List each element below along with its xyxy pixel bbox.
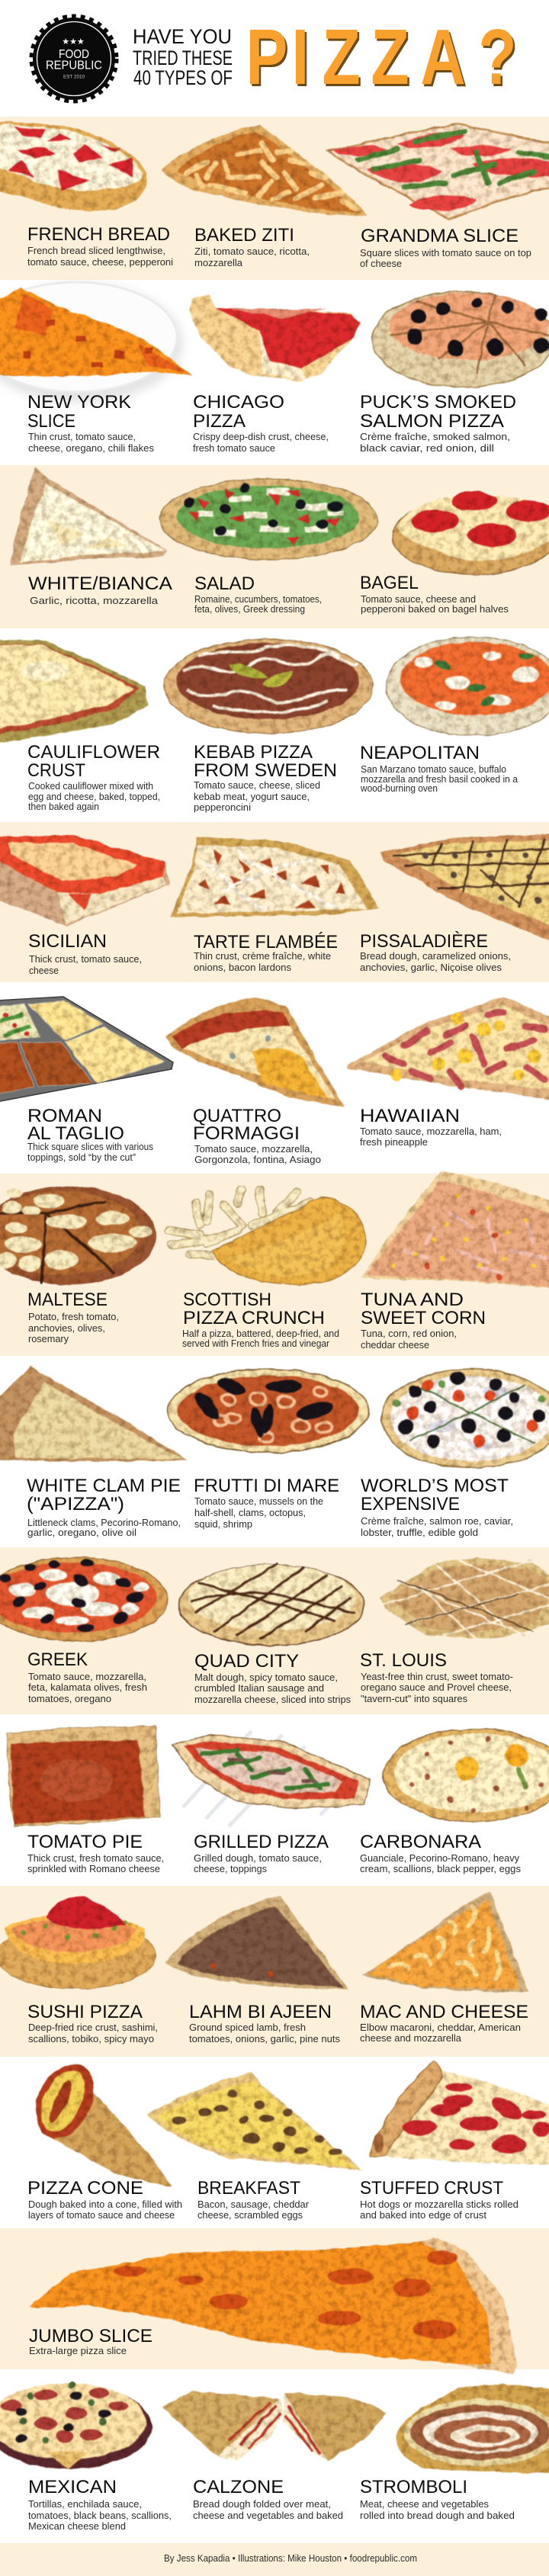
description: Puck's Smoked Salmon Pizza — [360, 431, 510, 454]
heading: Bagel: BAGEL — [360, 573, 419, 593]
description: Hawaiian — [360, 1126, 502, 1148]
pizza: baked ziti — [161, 124, 368, 216]
heading: Chicago Pizza: PIZZA — [193, 411, 246, 432]
description: Maltese: anchovies, olives, — [28, 1322, 105, 1334]
description: Breakfast — [197, 2199, 310, 2221]
pizza: breakfast — [147, 2072, 364, 2171]
logo: Food Republic badge: EST 2010 — [63, 75, 85, 79]
pizza: pizza cone — [24, 2054, 172, 2187]
pizza: salad — [159, 479, 377, 560]
heading: New York Slice — [27, 392, 132, 432]
description: Cauliflower Crust: then baked again — [28, 801, 99, 812]
description: Frutti di Mare: half-shell, clams, octopus, — [194, 1507, 306, 1518]
heading: Grandma Slice: GRANDMA SLICE — [361, 226, 518, 246]
description: Kebab Pizza from Sweden: pepperoncini — [194, 801, 251, 813]
heading: Tomato Pie: TOMATO PIE — [27, 1832, 143, 1852]
description: Hawaiian: Tomato sauce, mozzarella, ham, — [360, 1126, 502, 1137]
left half — [162, 2391, 284, 2460]
description: Cauliflower Crust — [28, 780, 160, 812]
heading: St. Louis: ST. LOUIS — [360, 1650, 447, 1671]
description: Frutti di Mare — [194, 1495, 323, 1530]
description: Calzone: Bread dough folded over meat, — [193, 2498, 331, 2510]
pizza: sicilian — [0, 835, 170, 927]
description: Mexican — [28, 2498, 172, 2532]
description: Cauliflower Crust: Cooked cauliflower mixed with — [28, 780, 153, 792]
heading: Maltese: MALTESE — [27, 1290, 108, 1310]
description: Lahm Bi Ajeen: tomatoes, onions, garlic, pine nuts — [189, 2033, 340, 2044]
heading: Sicilian: SICILIAN — [28, 931, 107, 952]
description: Chicago Pizza: fresh tomato sauce — [193, 442, 275, 454]
description: Quad City: mozzarella cheese, sliced into strips — [194, 1694, 351, 1705]
description: Roman al Taglio: Thick square slices with various — [27, 1141, 153, 1152]
pizza: roman al taglio tray — [0, 997, 173, 1102]
description: Baked Ziti: Ziti, tomato sauce, ricotta, — [194, 246, 310, 257]
pizza: white clam pie — [0, 1365, 188, 1462]
pizza: cauliflower crust — [0, 639, 149, 744]
description: Tuna and Sweet Corn — [361, 1328, 457, 1351]
heading: French Bread: FRENCH BREAD — [27, 224, 170, 245]
description: Bagel: pepperoni baked on bagel halves — [361, 603, 509, 615]
heading: White/Bianca: WHITE/BIANCA — [28, 573, 173, 594]
description: Maltese — [28, 1311, 119, 1344]
heading: Tuna and Sweet Corn: SWEET CORN — [361, 1308, 486, 1328]
pizza: st. louis — [380, 1557, 549, 1640]
description: Greek: tomatoes, oregano — [28, 1693, 111, 1704]
logo: Food Republic badge — [32, 17, 116, 101]
description: Grilled Pizza — [194, 1852, 322, 1874]
description: Breakfast: Bacon, sausage, cheddar — [197, 2199, 310, 2210]
heading: Tuna and Sweet Corn: TUNA AND — [361, 1290, 464, 1310]
pizza: white bianca — [10, 465, 168, 566]
heading: Greek: GREEK — [27, 1649, 88, 1670]
description: Mexican: Mexican cheese blend — [28, 2520, 126, 2532]
description: Hawaiian: fresh pineapple — [360, 1136, 428, 1148]
description: Bagel — [361, 593, 509, 615]
description: Pizza Cone: Dough baked into a cone, filled with — [28, 2199, 182, 2210]
description: World's Most Expensive: lobster, truffle, edible gold — [361, 1527, 478, 1538]
heading: World's Most Expensive: EXPENSIVE — [361, 1494, 460, 1514]
pizza: world's most expensive — [381, 1369, 549, 1468]
heading: Quattro Formaggi: QUATTRO — [193, 1106, 281, 1126]
description: Calzone: cheese and vegetables and baked — [193, 2510, 343, 2521]
description: Neapolitan: San Marzano tomato sauce, buffalo — [361, 763, 506, 775]
description: Stuffed Crust — [360, 2199, 518, 2221]
heading: Kebab Pizza from Sweden: FROM SWEDEN — [194, 760, 337, 781]
description: Tarte Flambée — [194, 950, 331, 973]
pizza: neapolitan — [386, 637, 549, 736]
description: Carbonara — [360, 1852, 521, 1874]
heading: Mac and Cheese: MAC AND CHEESE — [360, 2002, 528, 2022]
description: Kebab Pizza from Sweden: Tomato sauce, cheese, sliced — [194, 779, 320, 791]
description: Pizza Cone — [28, 2199, 182, 2221]
description: Pissaladière: anchovies, garlic, Niçoise olives — [360, 962, 502, 973]
description: French Bread: tomato sauce, cheese, pepperoni — [27, 256, 173, 268]
description: Stromboli: Meat, cheese and vegetables — [360, 2498, 489, 2510]
description: White/Bianca: Garlic, ricotta, mozzarella — [30, 595, 159, 606]
description: Neapolitan — [360, 763, 518, 794]
title: have you tried these 40 types of: HAVE YOU — [133, 25, 232, 48]
heading: White Clam Pie: ("APIZZA") — [27, 1494, 124, 1514]
description: Kebab Pizza from Sweden — [194, 779, 320, 813]
heading: Scottish Pizza Crunch: PIZZA CRUNCH — [183, 1308, 325, 1328]
logo: Food Republic badge: REPUBLIC — [46, 59, 102, 72]
right half — [284, 2392, 387, 2462]
heading: Frutti di Mare: FRUTTI DI MARE — [194, 1476, 339, 1496]
description: Salad: feta, olives, Greek dressing — [194, 603, 305, 615]
pizza: quattro formaggi — [165, 997, 345, 1107]
description: St. Louis — [361, 1671, 513, 1704]
heading: Breakfast: BREAKFAST — [197, 2178, 300, 2199]
fries — [168, 1190, 311, 1256]
pizza: quad city — [178, 1563, 364, 1646]
description: Maltese: rosemary — [28, 1333, 69, 1344]
pizza: french bread — [0, 122, 148, 211]
heading: Hawaiian: HAWAIIAN — [360, 1106, 460, 1126]
description: Roman al Taglio — [27, 1141, 153, 1163]
heading: New York Slice: NEW YORK — [27, 392, 132, 413]
heading: Puck's Smoked Salmon Pizza — [360, 392, 516, 432]
description: Quad City: Malt dough, spicy tomato sauce, — [194, 1672, 338, 1683]
description: Tuna and Sweet Corn: Tuna, corn, red onion, — [361, 1328, 457, 1339]
heading: Chicago Pizza — [193, 392, 284, 432]
heading: Pizza Cone: PIZZA CONE — [27, 2178, 143, 2199]
description: French Bread — [27, 245, 173, 268]
heading: Quad City: QUAD CITY — [194, 1651, 299, 1672]
description: Kebab Pizza from Sweden: kebab meat, yogurt sauce, — [194, 791, 310, 802]
description: Mac and Cheese — [360, 2022, 521, 2044]
description: Grandma Slice — [360, 247, 531, 269]
pizza: pissaladiere — [380, 834, 549, 946]
description: Tomato Pie — [27, 1852, 164, 1874]
description: Quattro Formaggi — [194, 1143, 321, 1165]
description: Chicago Pizza — [193, 431, 329, 454]
description: Carbonara: Guanciale, Pecorino-Romano, heavy — [360, 1852, 519, 1864]
heading: Roman al Taglio — [27, 1106, 124, 1144]
description: Lahm Bi Ajeen — [189, 2022, 340, 2044]
description: New York Slice: Thin crust, tomato sauce, — [28, 431, 136, 442]
pizza: carbonara — [383, 1729, 549, 1822]
description: Lahm Bi Ajeen: Ground spiced lamb, fresh — [189, 2022, 306, 2033]
heading: Scottish Pizza Crunch: SCOTTISH — [183, 1290, 271, 1310]
heading: New York Slice: SLICE — [27, 411, 75, 432]
description: Greek — [28, 1671, 147, 1704]
fried half pizza — [212, 1197, 366, 1284]
description: Baked Ziti — [194, 246, 310, 268]
heading: Carbonara: CARBONARA — [360, 1832, 482, 1852]
heading: Cauliflower Crust: CRUST — [27, 760, 85, 781]
panel: row 5 band — [0, 822, 549, 982]
pizza: tomato pie — [7, 1726, 161, 1826]
title: PIZZA?: PIZZA? — [246, 13, 517, 101]
description: Cauliflower Crust: egg and cheese, baked, topped, — [28, 791, 160, 802]
heading: World's Most Expensive — [361, 1476, 509, 1514]
panel: row 1 band — [0, 117, 549, 280]
description: Carbonara: cream, scallions, black pepper, eggs — [360, 1863, 521, 1874]
description: Quattro Formaggi: Tomato sauce, mozzarella, — [194, 1143, 313, 1155]
pizza: greek — [0, 1557, 168, 1641]
description: Stuffed Crust: Hot dogs or mozzarella sticks rolled — [360, 2199, 518, 2210]
logo: Food Republic badge: FOOD — [59, 48, 89, 61]
description: Mac and Cheese: Elbow macaroni, cheddar, American — [360, 2022, 521, 2033]
description: New York Slice — [28, 431, 154, 454]
description: Tuna and Sweet Corn: cheddar cheese — [361, 1339, 429, 1351]
description: Tarte Flambée: onions, bacon lardons — [194, 962, 292, 973]
pizza: mac and cheese — [361, 1891, 530, 1993]
heading: White Clam Pie: WHITE CLAM PIE — [27, 1476, 181, 1496]
pizza: lahm bi ajeen — [165, 1895, 348, 1990]
pizza: tarte flambee — [170, 837, 380, 917]
heading: Tuna and Sweet Corn — [361, 1290, 486, 1328]
description: Tomato Pie: Thick crust, fresh tomato sauce, — [27, 1852, 164, 1864]
description: Baked Ziti: mozzarella — [194, 257, 243, 268]
description: Chicago Pizza: Crispy deep-dish crust, cheese, — [193, 431, 329, 442]
pizza: bagel — [392, 491, 549, 575]
description: Scottish Pizza Crunch — [182, 1328, 339, 1349]
description: World's Most Expensive — [361, 1515, 513, 1538]
description: Mexican: Tortillas, enchilada sauce, — [28, 2498, 142, 2510]
heading: Puck's Smoked Salmon Pizza: PUCK’S SMOKED — [360, 392, 516, 413]
description: Mexican: tomatoes, black beans, scallions, — [28, 2510, 172, 2521]
title: have you tried these 40 types of — [133, 25, 233, 89]
description: St. Louis: oregano sauce and Provel cheese, — [361, 1681, 512, 1693]
description: Tomato Pie: sprinkled with Romano cheese — [27, 1863, 160, 1874]
heading: World's Most Expensive: WORLD’S MOST — [361, 1476, 509, 1496]
heading: Chicago Pizza: CHICAGO — [193, 392, 284, 413]
description: World's Most Expensive: Crème fraîche, salmon roe, caviar, — [361, 1515, 513, 1527]
pizza: tuna and sweet corn — [361, 1171, 549, 1289]
heading: Puck's Smoked Salmon Pizza: SALMON PIZZA — [360, 411, 505, 432]
heading: Jumbo Slice: JUMBO SLICE — [29, 2326, 152, 2346]
pizza: stuffed crust — [368, 2061, 549, 2166]
description: Stuffed Crust: and baked into edge of crust — [360, 2209, 486, 2221]
grill marks — [183, 1731, 358, 1826]
description: Roman al Taglio: toppings, sold “by the cut” — [27, 1151, 136, 1163]
heading: Cauliflower Crust: CAULIFLOWER — [27, 742, 160, 763]
pizza: calzone — [162, 2391, 387, 2462]
description: Stromboli: rolled into bread dough and baked — [360, 2510, 515, 2521]
description: St. Louis: "tavern-cut" into squares — [361, 1693, 467, 1704]
description: Pissaladière: Bread dough, caramelized onions, — [360, 950, 511, 962]
description: Stromboli — [360, 2498, 515, 2521]
description: Sushi Pizza: Deep-fried rice crust, sashimi, — [28, 2022, 158, 2033]
description: Grandma Slice: of cheese — [360, 258, 402, 269]
heading: Scottish Pizza Crunch — [183, 1290, 325, 1328]
heading: Grilled Pizza: GRILLED PIZZA — [194, 1832, 329, 1852]
pizza: puck's smoked salmon — [372, 291, 549, 387]
heading: Stuffed Crust: STUFFED CRUST — [360, 2178, 503, 2199]
description: Puck's Smoked Salmon Pizza: black caviar, red onion, dill — [360, 442, 494, 454]
description: Maltese: Potato, fresh tomato, — [28, 1311, 119, 1322]
pizza: new york slice on plate — [0, 282, 192, 403]
description: Greek: feta, kalamata olives, fresh — [28, 1681, 147, 1693]
heading: Sushi Pizza: SUSHI PIZZA — [27, 2002, 143, 2022]
description: White Clam Pie: garlic, oregano, olive oil — [27, 1527, 136, 1538]
panel: footer band — [0, 2543, 549, 2576]
pizza: frutti di mare — [168, 1369, 369, 1453]
pizza: grilled pizza — [172, 1731, 371, 1826]
heading: Mexican: MEXICAN — [28, 2477, 117, 2497]
pizza: stromboli — [396, 2385, 549, 2473]
pizza: mexican — [0, 2382, 152, 2469]
title: have you tried these 40 types of: 40 TYPES OF — [133, 66, 233, 89]
description: Quattro Formaggi: Gorgonzola, fontina, Asiago — [194, 1154, 321, 1165]
footer credits: By Jess Kapadia • Illustrations: Mike Houston • foodrepublic.com — [164, 2552, 417, 2564]
panel: row 11 band — [0, 1886, 549, 2057]
logo: Food Republic badge: ★★★ — [62, 37, 85, 47]
description: Quad City — [194, 1672, 351, 1705]
description: Jumbo Slice: Extra-large pizza slice — [29, 2345, 127, 2356]
description: Breakfast: cheese, scrambled eggs — [197, 2209, 303, 2221]
pizza: sushi — [0, 1897, 156, 1989]
description: Salad — [194, 593, 322, 615]
description: Scottish Pizza Crunch: served with French fries and vinegar — [182, 1338, 330, 1349]
description: Frutti di Mare: Tomato sauce, mussels on the — [194, 1495, 323, 1507]
heading: Roman al Taglio: ROMAN — [27, 1106, 102, 1126]
pizza: kebab from sweden — [164, 639, 373, 734]
grilled slice — [172, 1735, 371, 1809]
heading: Roman al Taglio: AL TAGLIO — [27, 1123, 124, 1144]
description: Mac and Cheese: cheese and mozzarella — [360, 2032, 462, 2044]
pizza: chicago — [189, 294, 361, 381]
description: Pissaladière — [360, 950, 511, 973]
heading: Calzone: CALZONE — [193, 2477, 284, 2497]
description: Quad City: crumbled Italian sausage and — [194, 1682, 324, 1694]
description: Sushi Pizza — [28, 2022, 158, 2044]
description: Sushi Pizza: scallions, tobiko, spicy mayo — [28, 2033, 154, 2044]
description: Sicilian — [29, 953, 142, 976]
description: White Clam Pie — [27, 1517, 181, 1538]
heading: Baked Ziti: BAKED ZITI — [194, 225, 294, 246]
description: Sicilian: cheese — [29, 965, 59, 976]
description: St. Louis: Yeast-free thin crust, sweet tomato- — [361, 1671, 513, 1682]
heading: Salad: SALAD — [194, 573, 255, 594]
heading: Pissaladière: PISSALADIÈRE — [360, 931, 488, 952]
description: Pizza Cone: layers of tomato sauce and cheese — [28, 2209, 175, 2221]
pizza: scottish pizza crunch with fries — [168, 1190, 366, 1284]
description: Neapolitan: mozzarella and fresh basil cooked in a — [361, 773, 518, 785]
slice — [0, 287, 192, 377]
heading: Cauliflower Crust — [27, 742, 160, 781]
panel: row 9 band — [0, 1547, 549, 1714]
heading: Lahm Bi Ajeen: LAHM BI AJEEN — [189, 2002, 332, 2022]
description: Scottish Pizza Crunch: Half a pizza, battered, deep-fried, and — [182, 1328, 339, 1339]
panel: row 3 band — [0, 465, 549, 628]
description: Neapolitan: wood-burning oven — [360, 782, 438, 794]
description: Sicilian: Thick crust, tomato sauce, — [29, 953, 142, 965]
heading: Quattro Formaggi — [193, 1106, 300, 1144]
heading: Tarte Flambée: TARTE FLAMBÉE — [194, 932, 338, 952]
description: White Clam Pie: Littleneck clams, Pecorino-Romano, — [27, 1517, 181, 1528]
heading: Neapolitan: NEAPOLITAN — [360, 743, 480, 763]
description: Greek: Tomato sauce, mozzarella, — [28, 1671, 146, 1682]
description: Puck's Smoked Salmon Pizza: Crème fraîche, smoked salmon, — [360, 431, 510, 442]
description: Tarte Flambée: Thin crust, crème fraîche, white — [194, 950, 331, 962]
description: Calzone — [193, 2498, 343, 2521]
description: Salad: Romaine, cucumbers, tomatoes, — [194, 593, 322, 605]
heading: Kebab Pizza from Sweden: KEBAB PIZZA — [194, 742, 313, 763]
description: Grilled Pizza: Grilled dough, tomato sauce, — [194, 1852, 322, 1864]
title: have you tried these 40 types of: TRIED THESE — [133, 47, 233, 69]
description: Bagel: Tomato sauce, cheese and — [361, 593, 476, 605]
description: Frutti di Mare: squid, shrimp — [194, 1518, 252, 1530]
heading: White Clam Pie — [27, 1476, 181, 1514]
heading: Quattro Formaggi: FORMAGGI — [193, 1123, 300, 1144]
pizza: hawaiian — [346, 997, 549, 1102]
panel: row 7 band — [0, 1174, 549, 1356]
heading: Kebab Pizza from Sweden — [194, 742, 337, 781]
description: Grilled Pizza: cheese, toppings — [194, 1863, 267, 1874]
description: French Bread: French bread sliced lengthwise, — [27, 245, 165, 256]
heading: Stromboli: STROMBOLI — [360, 2477, 467, 2497]
plate — [0, 282, 183, 403]
pizza: grandma slice — [327, 124, 549, 219]
description: Grandma Slice: Square slices with tomato sauce on top — [360, 247, 531, 259]
panel: row 13 band — [0, 2228, 549, 2369]
pizza: maltese — [0, 1186, 156, 1285]
description: New York Slice: cheese, oregano, chili flakes — [28, 442, 154, 454]
pizza: jumbo slice — [28, 2237, 518, 2374]
